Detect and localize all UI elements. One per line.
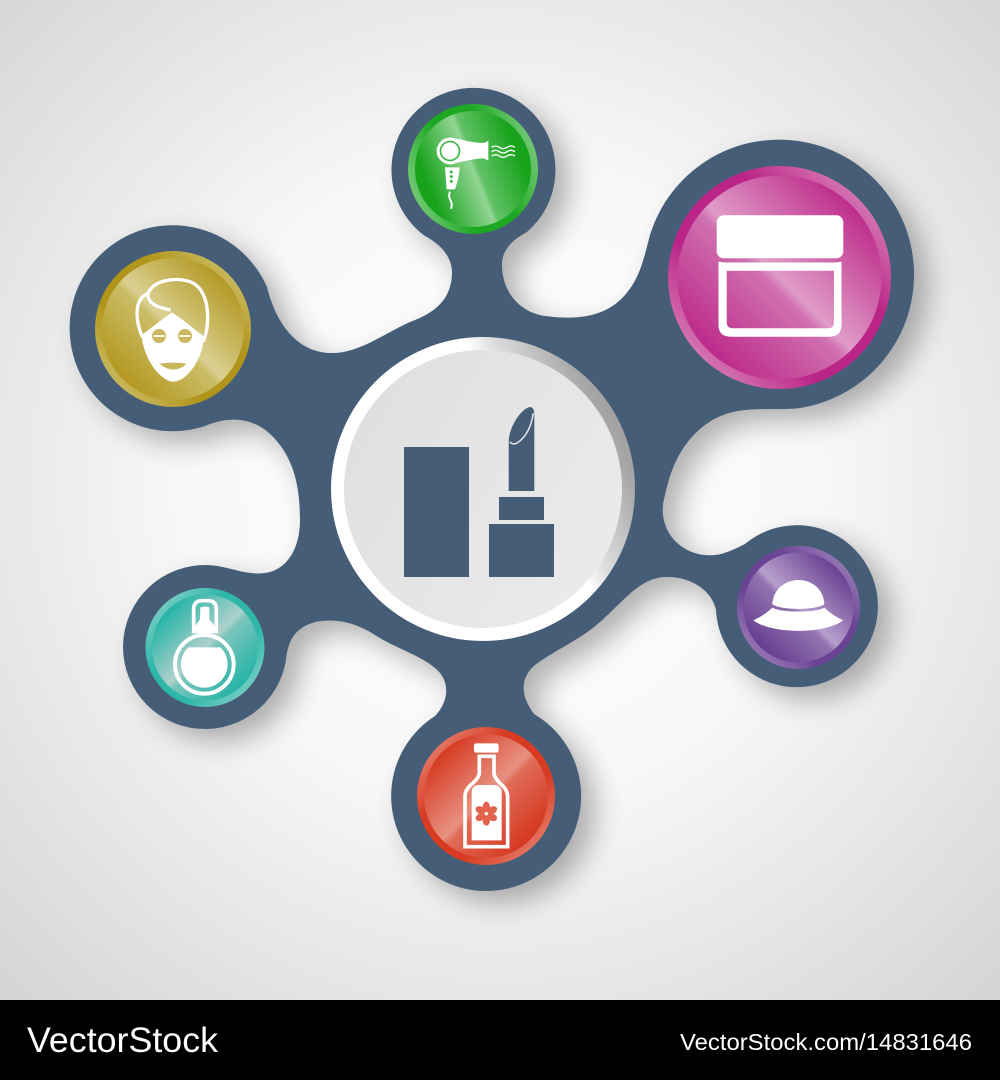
bottom node: bottle [417, 727, 555, 865]
icon: face mask [137, 280, 208, 382]
footer bar [0, 1000, 1000, 1080]
icon: hat [753, 580, 843, 631]
top-right node: cream jar [668, 166, 891, 389]
icon: spray bottle [175, 601, 234, 694]
icon: flower [474, 802, 499, 826]
top node: hair dryer [408, 104, 538, 234]
brand name: VectorStock [27, 1021, 219, 1060]
right node: hat [737, 546, 860, 669]
connector blob shape [70, 88, 914, 891]
icon: cream jar [717, 215, 843, 337]
icon: hair dryer [437, 138, 515, 209]
icon: lipstick and case [404, 407, 554, 577]
icon: bottle [465, 743, 508, 847]
image reference url: VectorStock.com/14831646 [680, 1029, 972, 1055]
left-bottom node: spray bottle [146, 588, 264, 707]
central circle: lipstick [331, 337, 635, 641]
left-top node: face mask [95, 251, 251, 407]
